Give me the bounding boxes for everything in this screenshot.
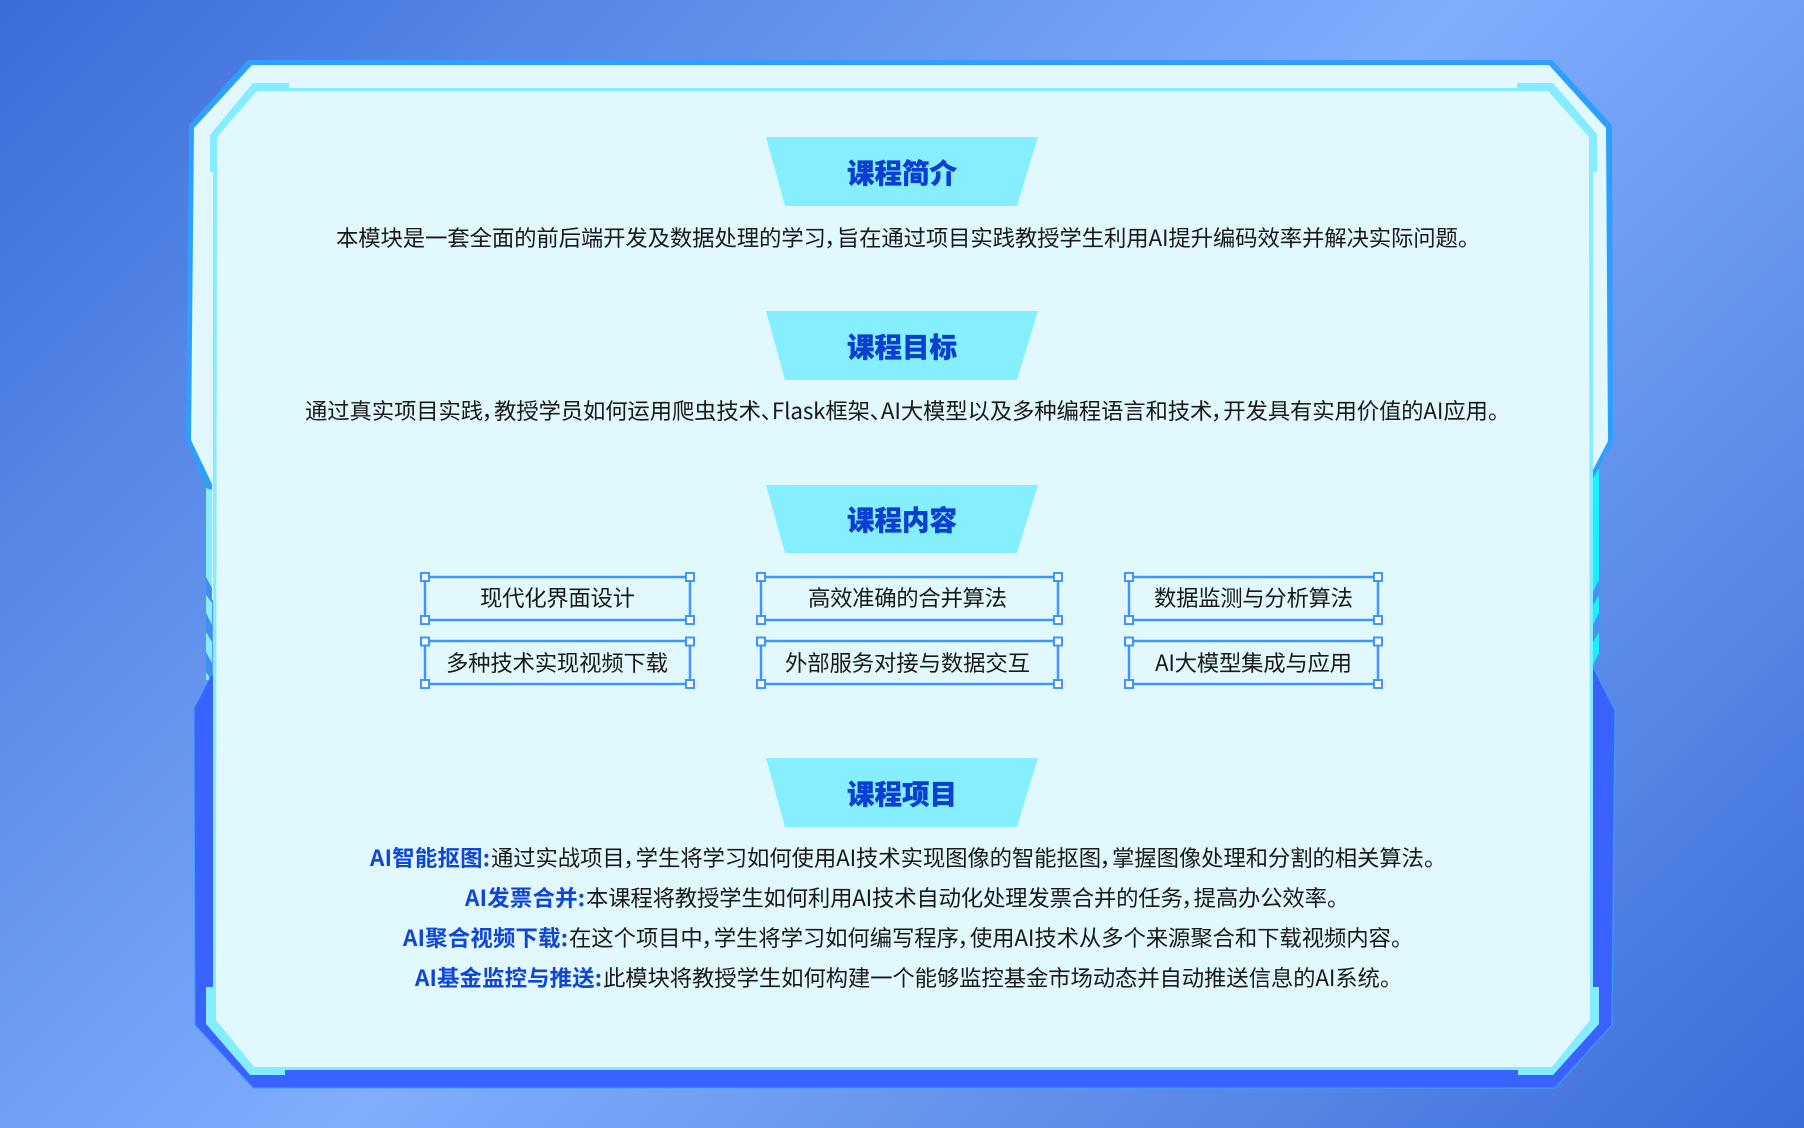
tag: 数据监测与分析算法: 数据监测与分析算法 — [1154, 581, 1353, 613]
frame: dark blue lower plate — [194, 667, 1615, 1088]
section: course goals — [305, 311, 1499, 426]
tag: 数据监测与分析算法 — [1125, 573, 1382, 624]
frame: right side strip — [1593, 468, 1599, 668]
tag: 外部服务对接与数据交互: 外部服务对接与数据交互 — [785, 646, 1030, 678]
project line: AI基金监控与推送: 此模块将教授学生如何构建一个能够监控基金市场动态并自动推送信息的AI系统。 — [603, 961, 1391, 993]
frame: light fill — [191, 65, 1608, 600]
section: course content — [421, 485, 1382, 688]
heading tab: goals — [766, 311, 1038, 380]
text: goals paragraph: 通过真实项目实践，教授学员如何运用爬虫技术、Flask框架、AI大模型以及多种编程语言和技术，开发具有实用价值的AI应用。 — [305, 394, 1499, 426]
heading tab: projects — [766, 758, 1038, 827]
project line: AI智能抠图: AI智能抠图: — [369, 841, 490, 873]
heading: 课程内容: 课程内容 — [847, 498, 957, 538]
tag: 高效准确的合并算法 — [757, 573, 1062, 624]
project line: AI发票合并: AI发票合并: — [464, 881, 585, 913]
tag: 现代化界面设计 — [421, 573, 694, 624]
tag: AI大模型集成与应用 — [1125, 638, 1382, 688]
heading: 课程目标: 课程目标 — [847, 325, 957, 365]
frame: outer blue border — [186, 60, 1613, 600]
heading tab: content — [766, 485, 1038, 553]
project line: AI聚合视频下载: 在这个项目中，学生将学习如何编写程序，使用AI技术从多个来源聚合和下载视频内容。 — [569, 921, 1402, 953]
project line: AI基金监控与推送: AI基金监控与推送: — [414, 961, 602, 993]
tag: 外部服务对接与数据交互 — [757, 638, 1062, 688]
tag: AI大模型集成与应用: AI大模型集成与应用 — [1155, 646, 1352, 678]
project line: AI发票合并: 本课程将教授学生如何利用AI技术自动化处理发票合并的任务，提高办公效率。 — [586, 881, 1338, 913]
panel: main content area — [216, 91, 1590, 1067]
tag: 高效准确的合并算法: 高效准确的合并算法 — [808, 581, 1007, 613]
tag: 多种技术实现视频下载: 多种技术实现视频下载 — [446, 646, 668, 678]
frame: cyan inner border — [206, 83, 1599, 1075]
heading: 课程项目: 课程项目 — [847, 772, 957, 812]
text: introduction paragraph: 本模块是一套全面的前后端开发及数据处理的学习，旨在通过项目实践教授学生利用AI提升编码效率并解决实际问题。 — [336, 221, 1469, 253]
project line: AI智能抠图: 通过实战项目，学生将学习如何使用AI技术实现图像的智能抠图，掌握图像处理和分割的相关算法。 — [491, 841, 1435, 873]
heading tab: introduction — [766, 137, 1038, 206]
section: course projects — [369, 758, 1435, 993]
frame: left side strip — [206, 488, 212, 680]
project line: AI聚合视频下载: AI聚合视频下载: — [402, 921, 568, 953]
heading: 课程简介: 课程简介 — [847, 151, 957, 191]
tag: 多种技术实现视频下载 — [421, 638, 694, 688]
tag: 现代化界面设计: 现代化界面设计 — [480, 581, 635, 613]
section: course introduction — [336, 137, 1469, 253]
